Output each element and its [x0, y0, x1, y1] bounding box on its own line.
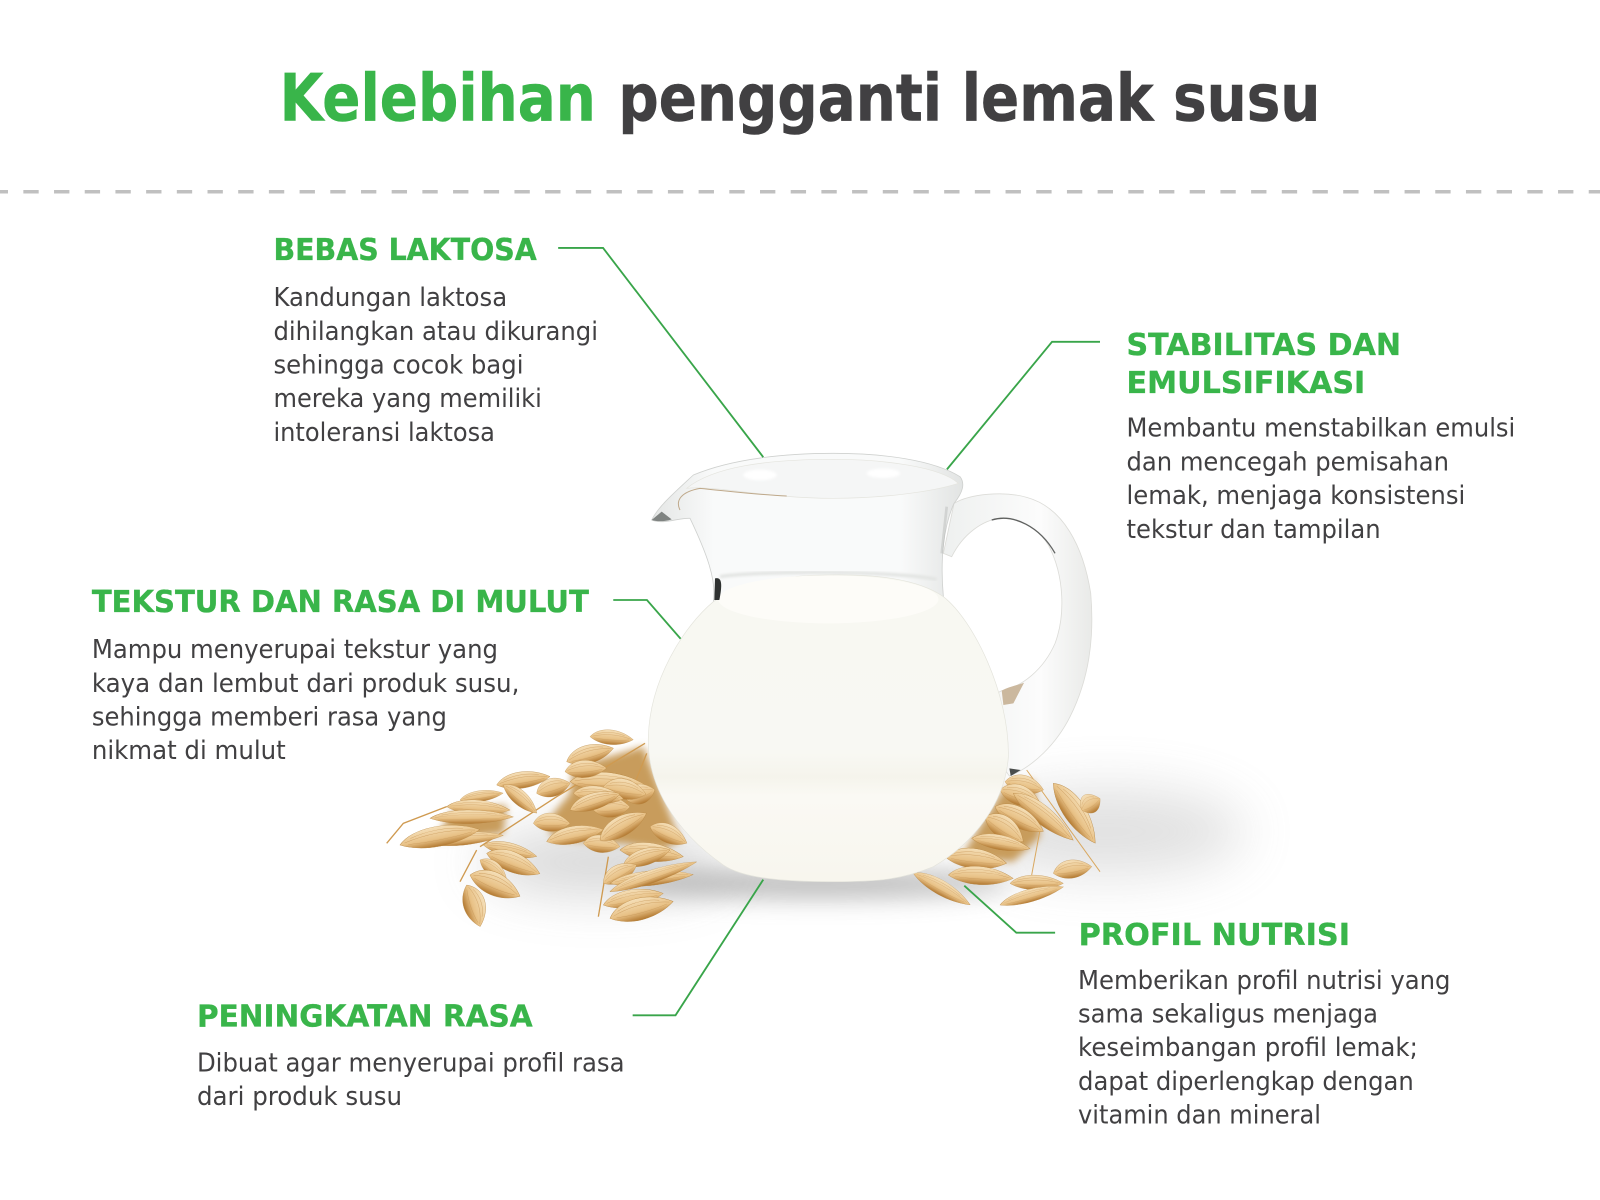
heading: BEBAS LAKTOSA [273, 233, 537, 268]
milk body [648, 575, 1008, 882]
body text: lemak, menjaga konsistensi [1127, 481, 1465, 511]
body text: Kandungan laktosa [273, 283, 507, 313]
body text: Memberikan profil nutrisi yang [1078, 966, 1451, 996]
milk surface [718, 575, 938, 623]
body text: Mampu menyerupai tekstur yang [92, 635, 498, 665]
body text: Membantu menstabilkan emulsi [1127, 414, 1515, 444]
oats: right cluster [910, 770, 1105, 910]
body text: dihilangkan atau dikurangi [273, 317, 598, 347]
body text: sehingga memberi rasa yang [92, 703, 447, 733]
body text: mereka yang memiliki [273, 384, 542, 414]
leader line: tekstur [613, 600, 681, 639]
panel: peningkatan rasa [197, 1000, 624, 1112]
milk jug [648, 453, 1092, 882]
body text: keseimbangan profil lemak; [1078, 1033, 1418, 1063]
title: pengganti lemak susu [618, 60, 1320, 136]
heading: STABILITAS DAN [1127, 328, 1401, 363]
body text [273, 283, 598, 448]
body text [1127, 414, 1515, 545]
body text: Dibuat agar menyerupai profil rasa [197, 1048, 624, 1078]
heading: TEKSTUR DAN RASA DI MULUT [92, 585, 589, 620]
body text [1078, 966, 1451, 1130]
leader line: profil nutrisi [964, 886, 1055, 933]
leader line: stabilitas [947, 342, 1100, 469]
title [280, 60, 1320, 136]
leader line: peningkatan rasa [633, 880, 763, 1015]
body text: vitamin dan mineral [1078, 1100, 1321, 1130]
body text: nikmat di mulut [92, 736, 286, 766]
body text: sama sekaligus menjaga [1078, 999, 1378, 1029]
body text: tekstur dan tampilan [1127, 515, 1381, 545]
glass dark reflection [714, 578, 721, 600]
heading [1127, 328, 1401, 401]
heading: PROFIL NUTRISI [1079, 918, 1350, 953]
ground shadow [480, 789, 1245, 898]
panel: tekstur dan rasa di mulut [92, 585, 589, 766]
heading: PENINGKATAN RASA [197, 1000, 533, 1035]
body text [92, 635, 519, 766]
body text: intoleransi laktosa [273, 418, 495, 448]
heading: EMULSIFIKASI [1127, 366, 1365, 401]
oats: left cluster [387, 728, 699, 930]
jug handle [943, 494, 1092, 776]
body text: dan mencegah pemisahan [1127, 447, 1449, 477]
panel: bebas laktosa [273, 233, 598, 448]
body text: dari produk susu [197, 1082, 402, 1112]
panel: stabilitas dan emulsifikasi [1127, 328, 1515, 545]
leader line: bebas laktosa [558, 248, 763, 457]
glass neck [652, 453, 963, 602]
panel: profil nutrisi [1078, 918, 1451, 1130]
body text: sehingga cocok bagi [273, 350, 523, 380]
title: Kelebihan [280, 60, 596, 136]
body text: kaya dan lembut dari produk susu, [92, 669, 519, 699]
body text: dapat diperlengkap dengan [1078, 1067, 1414, 1097]
body text [197, 1048, 624, 1112]
jug rim highlight [687, 459, 958, 498]
